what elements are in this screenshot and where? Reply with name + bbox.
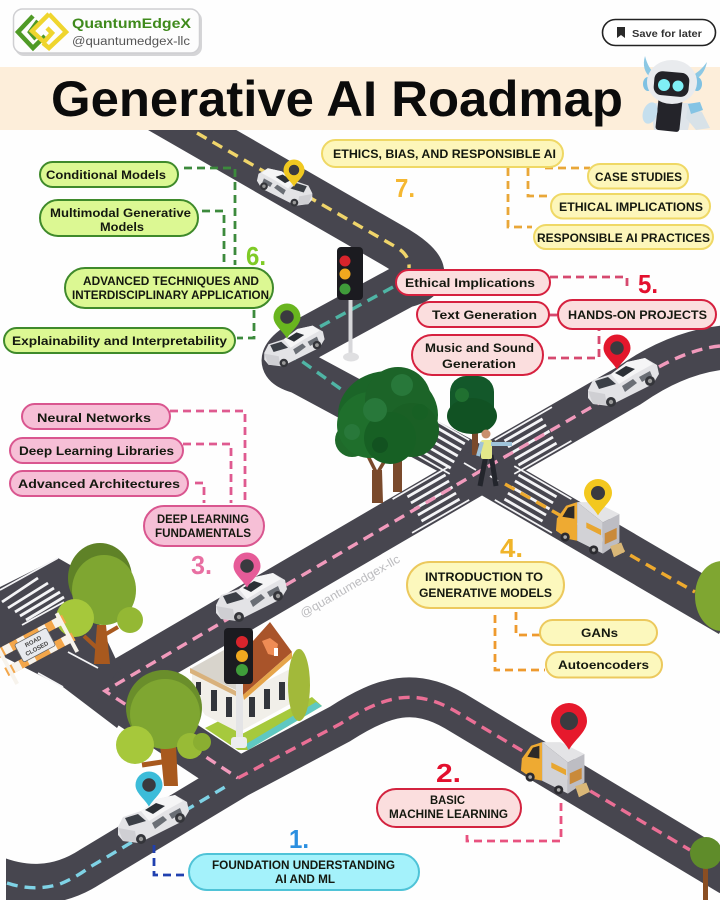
- connector: step 2: [467, 803, 561, 841]
- pin: red van: [551, 703, 587, 750]
- pill: foundation understanding: FOUNDATION UNDERSTANDING: [212, 858, 395, 872]
- car: green stop: [264, 326, 325, 367]
- pill: music and sound: Music and Sound: [425, 341, 534, 355]
- pill: music and sound: Generation: [442, 357, 516, 371]
- panel: step 7 ethics: [322, 140, 713, 249]
- traffic officer: [478, 430, 512, 486]
- brand name: QuantumEdgeX: [72, 15, 192, 31]
- connector: step 4: [495, 612, 545, 670]
- pill: music and sound: [412, 335, 543, 375]
- sign text: ROAD: [24, 635, 43, 649]
- pill: advanced architectures: [10, 471, 188, 496]
- car: top road: [257, 168, 312, 206]
- pill: deep learning libraries: [10, 438, 183, 463]
- pill: autoencoders: [546, 652, 662, 678]
- icon: bookmark: [617, 27, 625, 38]
- pill: advanced techniques: ADVANCED TECHNIQUES AND: [83, 274, 259, 288]
- left margin cut: [0, 856, 6, 900]
- icon: robot mascot: [640, 56, 710, 132]
- pill: introduction to generative models: INTRODUCTION TO: [425, 570, 543, 584]
- number 4: 4.: [500, 533, 523, 563]
- pin: yellow: [284, 160, 304, 187]
- connector: step 6: [184, 168, 254, 338]
- center white markings: [464, 463, 498, 481]
- title: Generative AI Roadmap: [51, 71, 623, 127]
- pill: autoencoders: Autoencoders: [558, 658, 649, 672]
- pill: multimodal generative models: Multimodal Generative: [50, 206, 191, 220]
- central crossing SE: [495, 466, 571, 533]
- panel: step 5 hands-on projects: [396, 269, 716, 375]
- pill: foundation understanding: AI AND ML: [275, 872, 335, 886]
- car: pink stop: [216, 573, 287, 622]
- number 6: 6.: [246, 241, 266, 271]
- lane: ethics yellow: [197, 133, 409, 268]
- central crossing NW: [405, 414, 469, 474]
- watermark: @quantumedgex-llc: [298, 552, 402, 621]
- pill: foundation understanding: [189, 854, 419, 890]
- car: red stop: [588, 358, 659, 407]
- tree: bottom right: [690, 837, 720, 900]
- van: red stop: [521, 742, 590, 797]
- pill: basic machine learning: MACHINE LEARNING: [389, 807, 508, 821]
- lane: yellow intro stretch: [505, 484, 695, 592]
- crosswalks: [0, 407, 571, 687]
- connector: step 7: [508, 168, 590, 227]
- pill: case studies: CASE STUDIES: [595, 170, 682, 184]
- panel: step 3 deep learning: [10, 404, 264, 580]
- pill: basic machine learning: [377, 789, 521, 827]
- panel: step 6 advanced techniques: [4, 162, 273, 353]
- tree: tall green: [447, 376, 497, 455]
- save for later button: [602, 20, 716, 46]
- left crossing: [0, 558, 98, 687]
- pill: introduction to generative models: GENERATIVE MODELS: [419, 586, 552, 600]
- windows: [196, 682, 285, 717]
- central crossing SW: [393, 466, 469, 533]
- tree: right edge olive: [695, 561, 720, 631]
- connector: step 3: [170, 411, 245, 503]
- button label: Save for later: [632, 28, 702, 40]
- tree: center olive: [116, 670, 211, 786]
- pill: advanced techniques: [65, 268, 273, 308]
- pin: green: [274, 304, 300, 339]
- tree: left olive: [56, 543, 143, 664]
- panel: step 1 foundation: [189, 824, 419, 890]
- header band: [0, 67, 720, 130]
- pill: GANs: [540, 620, 657, 645]
- pill: responsible AI practices: RESPONSIBLE AI PRACTICES: [537, 231, 710, 245]
- pill: introduction to generative models: [407, 562, 564, 608]
- left wall: [192, 668, 238, 732]
- pill: deep learning fundamentals: FUNDAMENTALS: [155, 526, 251, 540]
- pill: conditional models: Conditional Models: [46, 168, 166, 182]
- pill: GANs: GANs: [581, 626, 618, 640]
- pill: ethics bias: ETHICS, BIAS, AND RESPONSIBLE AI: [333, 147, 556, 161]
- pill: ethics bias: [322, 140, 563, 167]
- tree: cypress by house: [288, 649, 310, 721]
- number 7: 7.: [395, 173, 415, 203]
- pill: responsible AI practices: [534, 225, 713, 249]
- connector: step 1: [154, 845, 188, 875]
- pill: deep learning fundamentals: [144, 506, 264, 546]
- pill: case studies: [588, 164, 688, 188]
- road: top ethics road: [148, 130, 480, 471]
- pill: ethical implications red: Ethical Implications: [405, 276, 535, 290]
- pill: deep learning fundamentals: DEEP LEARNING: [157, 512, 249, 526]
- lawn: [205, 697, 322, 750]
- panel: step 2 basic ML: [377, 758, 521, 827]
- traffic light: lower: [224, 628, 253, 748]
- panel: step 4 intro generative: [407, 533, 662, 678]
- number 3: 3.: [191, 550, 212, 580]
- lane: pink deep learning stretch: [105, 346, 720, 778]
- pill: text generation: Text Generation: [432, 308, 537, 322]
- central crossing NE: [495, 407, 571, 474]
- connector: step 5: [548, 277, 627, 358]
- right wall: [243, 668, 292, 730]
- pill: ethical implications: ETHICAL IMPLICATIONS: [559, 200, 703, 214]
- pill: explainability: Explainability and Interpretability: [12, 334, 227, 348]
- road: lower winding road: [0, 697, 720, 884]
- pin: pink: [234, 552, 260, 588]
- traffic light: upper: [337, 247, 363, 362]
- pin: yellow van: [584, 479, 612, 515]
- handle: @quantumedgex-llc: [72, 36, 190, 48]
- number 5: 5.: [638, 269, 658, 299]
- barricade: CLOSED: [25, 641, 50, 658]
- barricade: [0, 611, 81, 686]
- road: connector: [118, 703, 242, 778]
- pill: neural networks: [22, 404, 170, 429]
- pill: explainability: [4, 328, 235, 353]
- pill: ethical implications: [551, 194, 710, 218]
- lane: pink basic ML stretch: [238, 697, 690, 850]
- pin: cyan: [136, 772, 162, 807]
- pill: advanced architectures: Advanced Architectures: [18, 477, 180, 491]
- number 1: 1.: [289, 824, 309, 854]
- pill: basic machine learning: BASIC: [430, 793, 465, 807]
- icon: interlocked diamonds: [18, 14, 66, 48]
- tree: large green pair: [335, 367, 439, 503]
- pin: red: [604, 334, 630, 370]
- road: lower right arm: [482, 470, 720, 615]
- lane: cyan foundation stretch: [7, 787, 225, 888]
- pill: advanced techniques: INTERDISCIPLINARY APPLICATION: [72, 288, 269, 302]
- road: main diagonal: [105, 347, 720, 690]
- pill: multimodal generative models: Models: [100, 220, 144, 234]
- car: cyan stop: [118, 795, 189, 844]
- house: [190, 622, 322, 750]
- pill: conditional models: [40, 162, 178, 187]
- van: yellow stop: [556, 502, 625, 557]
- pill: hands-on projects: HANDS-ON PROJECTS: [568, 308, 707, 322]
- number 2: 2.: [436, 758, 461, 788]
- pill: ethical implications red: [396, 270, 550, 295]
- pill: text generation: [417, 302, 549, 327]
- roof: [236, 622, 292, 695]
- pill: hands-on projects: [558, 300, 716, 329]
- pill: multimodal generative models: [40, 200, 198, 236]
- pill: deep learning libraries: Deep Learning Libraries: [19, 444, 174, 458]
- logo card: [14, 9, 202, 56]
- lane: teal projects stretch: [288, 287, 393, 392]
- road: far left junction: [0, 558, 125, 728]
- pill: neural networks: Neural Networks: [37, 411, 151, 425]
